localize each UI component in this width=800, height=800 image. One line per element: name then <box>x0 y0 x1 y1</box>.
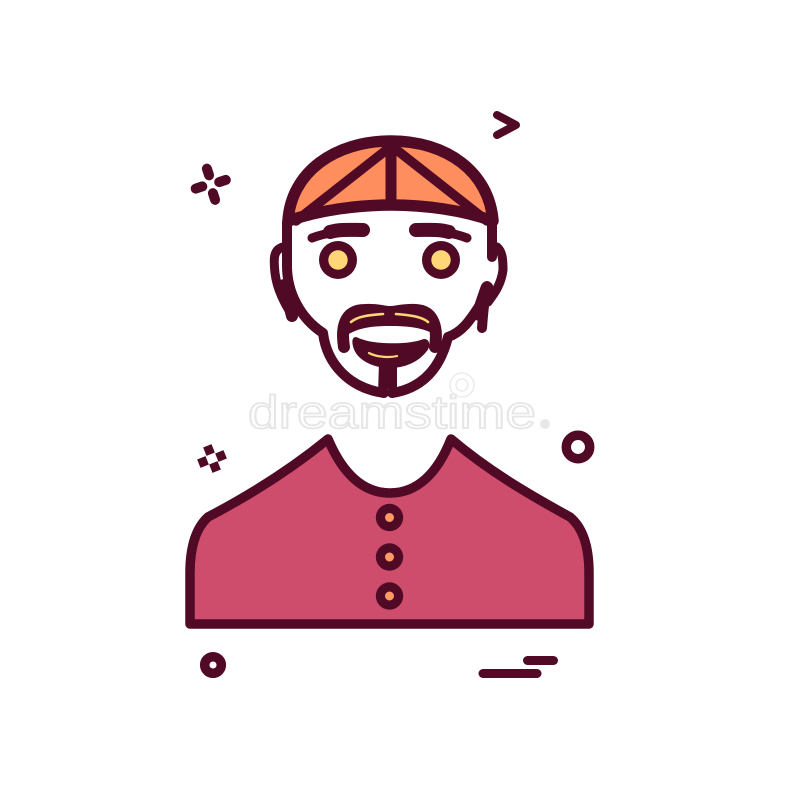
face outline and ears <box>274 222 503 393</box>
goatee <box>354 339 427 397</box>
shirt <box>190 439 589 624</box>
icon: four-petal sparkle <box>189 162 232 206</box>
watermark <box>248 373 550 438</box>
icon: speed dashes <box>478 656 558 678</box>
mustache <box>343 310 436 347</box>
left eye <box>319 241 357 279</box>
cap <box>288 141 493 223</box>
icon: diamond squares <box>197 444 227 473</box>
icon: ring bottom left <box>205 657 221 673</box>
button 3 <box>376 582 403 610</box>
watermark: dreamstime <box>248 386 536 438</box>
icon: chevron <box>497 115 516 135</box>
button 1 <box>376 504 403 531</box>
right eyebrow <box>416 230 467 238</box>
icon: ring top right <box>566 435 590 459</box>
right eye <box>422 241 460 279</box>
button 2 <box>376 543 403 571</box>
left eyebrow <box>312 230 363 238</box>
